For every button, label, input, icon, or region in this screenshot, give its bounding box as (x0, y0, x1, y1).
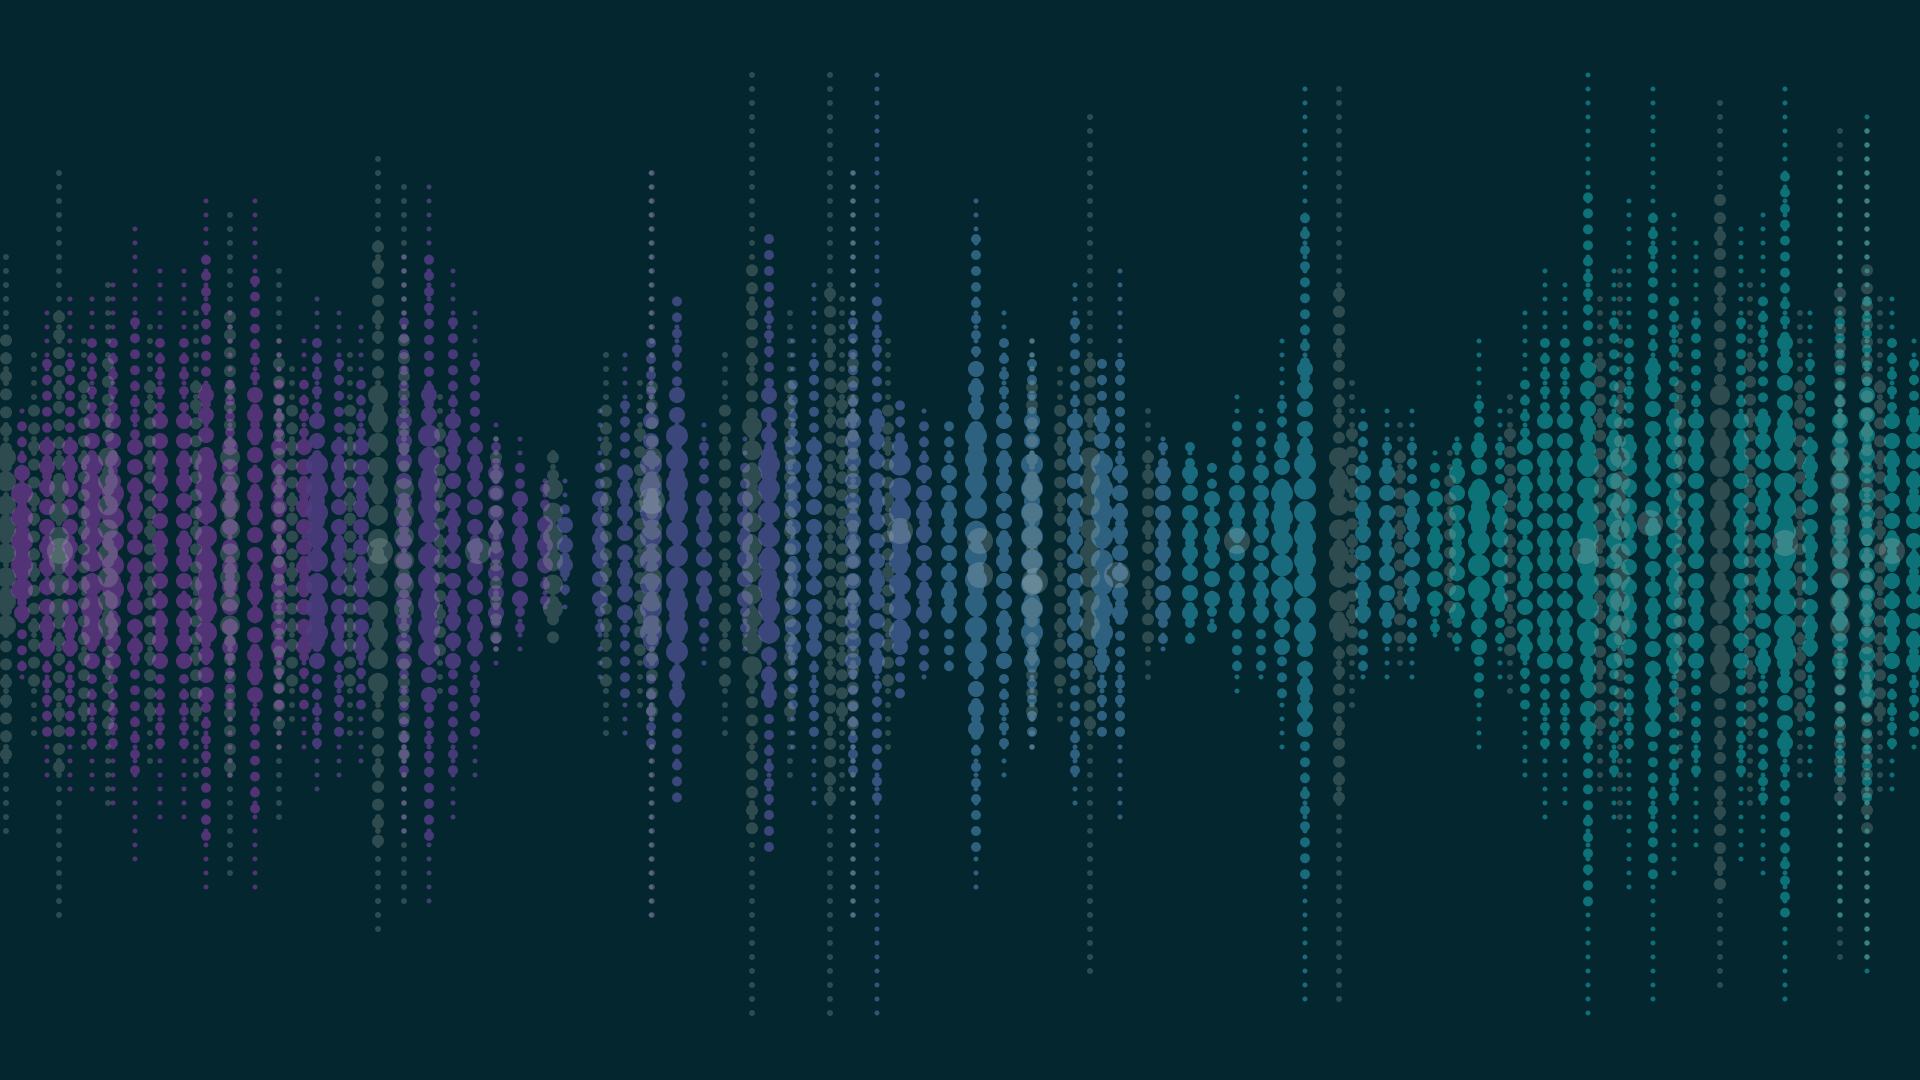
waveform band: indigo (565, 173, 769, 929)
waveform band: teal (1435, 75, 1914, 1027)
waveform band: blue teal (1190, 89, 1412, 1013)
waveform band: steel blue (949, 201, 1163, 901)
waveform band: purple (22, 201, 304, 901)
waveform band: violet (317, 187, 545, 915)
waveform highlights: bright dots along the centre line (60, 501, 1892, 581)
waveform band: slate blue (793, 75, 924, 1027)
